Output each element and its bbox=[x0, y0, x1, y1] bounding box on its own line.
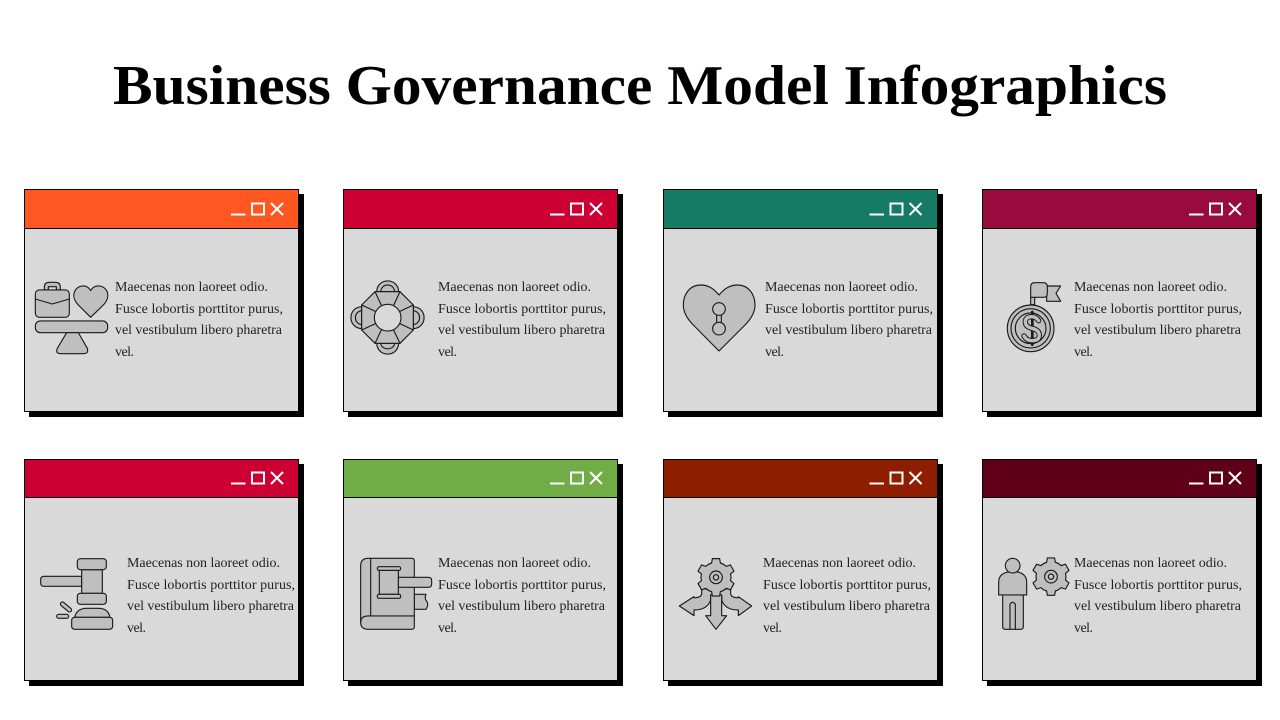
window controls bbox=[870, 472, 922, 484]
text block: Maecenas non laoreet odio. bbox=[1074, 556, 1227, 571]
text block: vel vestibulum libero pharetra bbox=[438, 599, 606, 614]
window controls bbox=[1189, 472, 1241, 484]
window controls bbox=[231, 203, 283, 215]
text block: Fusce lobortis porttitor purus, bbox=[438, 578, 606, 593]
title: Business Governance Model Infographics bbox=[113, 55, 1167, 117]
text block: Maecenas non laoreet odio. bbox=[127, 556, 280, 571]
text block: vel vestibulum libero pharetra bbox=[763, 599, 931, 614]
panel: card 6 green bbox=[344, 460, 623, 686]
text block bbox=[765, 280, 933, 360]
text block: vel vestibulum libero pharetra bbox=[115, 323, 283, 338]
text block: vel vestibulum libero pharetra bbox=[1074, 323, 1242, 338]
text block: vel vestibulum libero pharetra bbox=[438, 323, 606, 338]
text block: vel vestibulum libero pharetra bbox=[765, 323, 933, 338]
text block: vel. bbox=[438, 345, 457, 360]
text block: Fusce lobortis porttitor purus, bbox=[763, 578, 931, 593]
text block: Fusce lobortis porttitor purus, bbox=[1074, 302, 1242, 317]
window controls bbox=[1189, 203, 1241, 215]
text block: vel vestibulum libero pharetra bbox=[1074, 599, 1242, 614]
text block bbox=[438, 556, 606, 636]
window controls bbox=[231, 472, 283, 484]
text block: vel. bbox=[127, 621, 146, 636]
text block bbox=[763, 556, 931, 636]
icon: heart keyhole bbox=[683, 285, 755, 351]
panel: card 8 dark maroon bbox=[982, 460, 1262, 686]
text block bbox=[115, 280, 283, 360]
text block bbox=[127, 556, 295, 636]
icon: coin with flag bbox=[1007, 283, 1061, 352]
text block bbox=[1074, 556, 1242, 636]
text block: vel. bbox=[765, 345, 784, 360]
text block: Fusce lobortis porttitor purus, bbox=[438, 302, 606, 317]
panel: card 3 teal bbox=[664, 190, 943, 417]
text block: vel. bbox=[115, 345, 134, 360]
panel: card 7 rust bbox=[664, 460, 943, 686]
text block bbox=[438, 280, 606, 360]
text block bbox=[1074, 280, 1242, 360]
text block: vel vestibulum libero pharetra bbox=[127, 599, 295, 614]
panel: card 4 wine bbox=[982, 190, 1262, 417]
icon: gavel bbox=[41, 559, 113, 629]
icon: law book with gavel bbox=[361, 558, 432, 629]
window controls bbox=[550, 203, 602, 215]
text block: Maecenas non laoreet odio. bbox=[438, 556, 591, 571]
text block: Fusce lobortis porttitor purus, bbox=[115, 302, 283, 317]
panel: card 1 orange bbox=[24, 190, 304, 417]
panel: card 2 crimson bbox=[344, 190, 623, 417]
text block: vel. bbox=[1074, 621, 1093, 636]
text block: Maecenas non laoreet odio. bbox=[763, 556, 916, 571]
text block: Maecenas non laoreet odio. bbox=[115, 280, 268, 295]
text block: Maecenas non laoreet odio. bbox=[765, 280, 918, 295]
text block: vel. bbox=[438, 621, 457, 636]
text block: Fusce lobortis porttitor purus, bbox=[127, 578, 295, 593]
icon: lifebuoy bbox=[351, 281, 424, 354]
panel: card 5 crimson bbox=[24, 460, 304, 686]
text block: Maecenas non laoreet odio. bbox=[438, 280, 591, 295]
window controls bbox=[870, 203, 922, 215]
text block: vel. bbox=[763, 621, 782, 636]
text block: vel. bbox=[1074, 345, 1093, 360]
window controls bbox=[550, 472, 602, 484]
text block: Fusce lobortis porttitor purus, bbox=[765, 302, 933, 317]
text block: Fusce lobortis porttitor purus, bbox=[1074, 578, 1242, 593]
icon: gear with three arrows bbox=[679, 559, 752, 629]
icon: briefcase and heart on balance bbox=[35, 282, 108, 354]
icon: person with gear bbox=[999, 558, 1069, 629]
text block: Maecenas non laoreet odio. bbox=[1074, 280, 1227, 295]
